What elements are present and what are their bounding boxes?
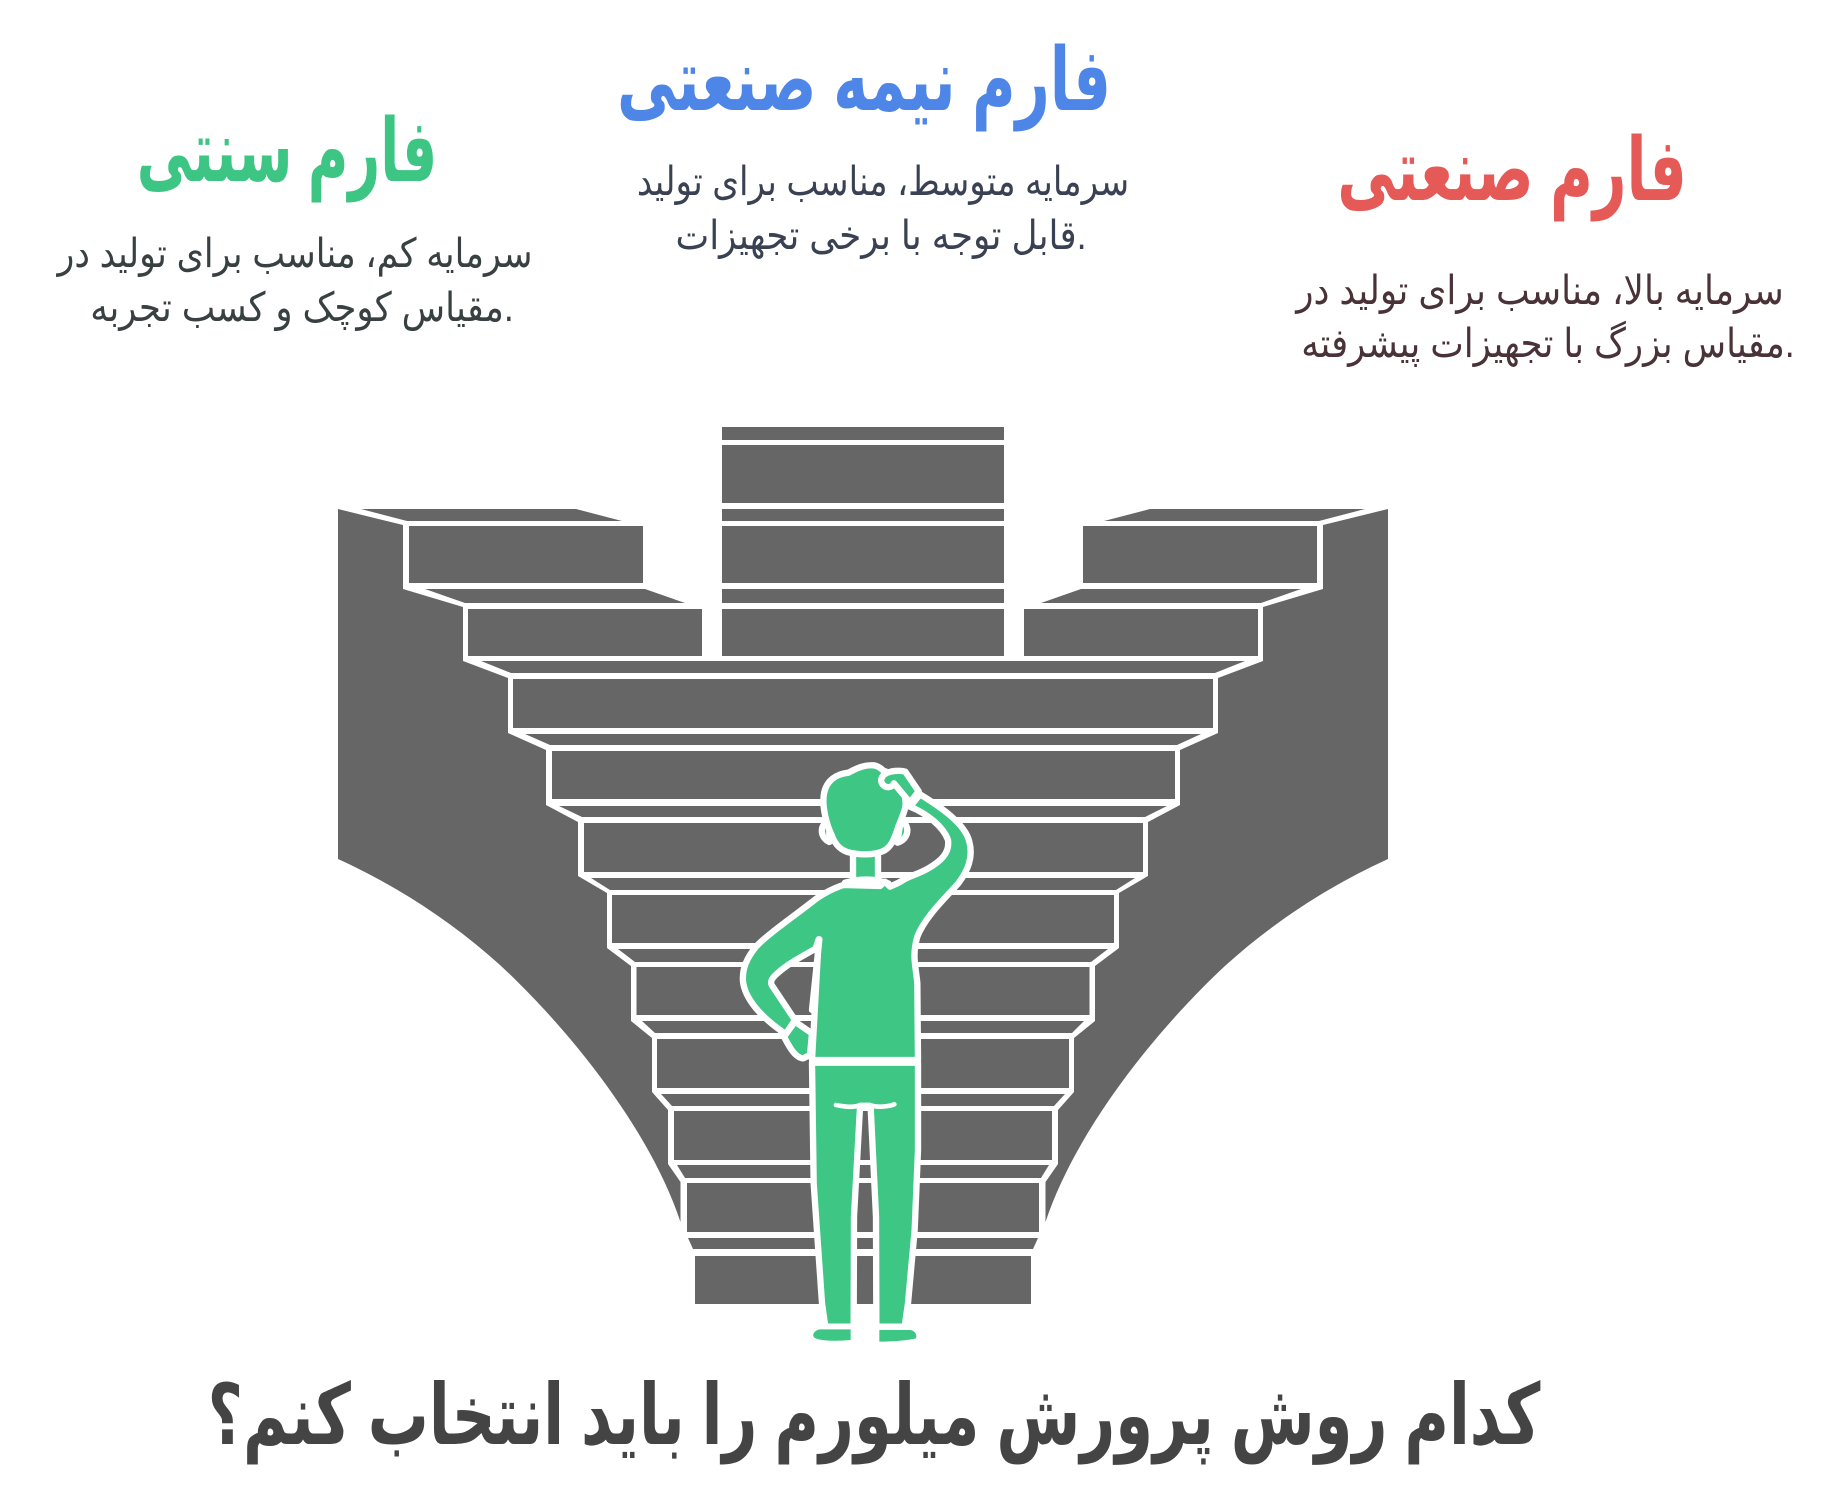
panel: industrial farm (1294, 121, 1795, 368)
text block: traditional farm description: مقیاس کوچک و کسب تجربه. (90, 286, 514, 332)
heading: industrial farm: فارم صنعتی (1337, 121, 1687, 221)
text block: traditional farm description: سرمایه کم، مناسب برای تولید در (56, 231, 532, 278)
left staircase branch (361, 509, 702, 656)
chart: branching staircase (338, 427, 1388, 1304)
right wall (1046, 509, 1388, 1222)
text block: industrial farm description: مقیاس بزرگ با تجهیزات پیشرفته. (1301, 321, 1795, 368)
panel: semi-industrial farm (617, 30, 1129, 260)
heading: semi-industrial farm: فارم نیمه صنعتی (617, 30, 1111, 131)
heading: traditional farm: فارم سنتی (137, 103, 437, 202)
text block: industrial farm description: سرمایه بالا، مناسب برای تولید در (1294, 268, 1784, 315)
neck (853, 848, 878, 880)
right shoe (879, 1330, 916, 1342)
collar (845, 879, 888, 887)
text block: semi-industrial farm description (637, 158, 1129, 260)
main staircase steps (481, 661, 1245, 1304)
centre staircase (722, 427, 1004, 656)
icon: thinking person from behind (743, 765, 971, 1342)
left shoe (813, 1329, 851, 1341)
head (823, 765, 906, 854)
left hand (784, 1022, 812, 1058)
left ear (822, 821, 829, 842)
armpit line (812, 939, 819, 1010)
text block: traditional farm description (56, 231, 532, 332)
trousers (812, 1063, 918, 1327)
text block: industrial farm description (1294, 268, 1795, 368)
text block: semi-industrial farm description: قابل توجه با برخی تجهیزات. (675, 213, 1087, 260)
trouser crease (836, 1104, 894, 1107)
torso and arms (743, 794, 971, 1060)
scratching hand (881, 771, 919, 803)
right ear (897, 821, 907, 843)
text block: semi-industrial farm description: سرمایه متوسط، مناسب برای تولید (637, 158, 1129, 205)
title: main question: کدام روش پرورش میلورم را باید انتخاب کنم؟ (208, 1367, 1541, 1466)
panel: traditional farm (56, 103, 532, 332)
left wall (338, 509, 680, 1222)
right staircase branch (1024, 509, 1365, 656)
